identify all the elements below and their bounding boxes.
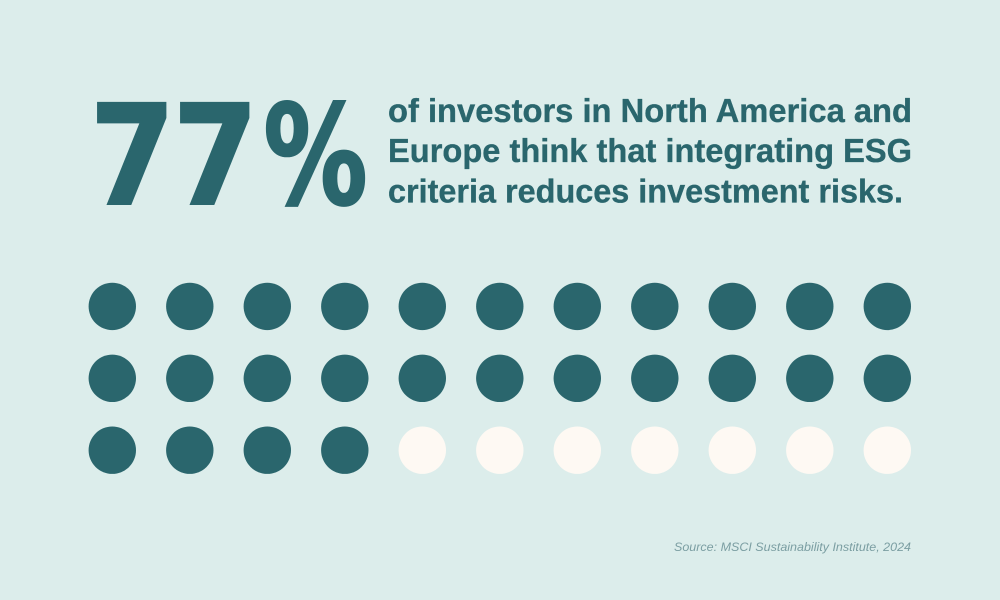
dot matrix: 77 percent filled <box>89 283 911 474</box>
dot row 3: unfilled <box>399 426 911 474</box>
source note: Source: MSCI Sustainability Institute, 2024 <box>674 540 911 554</box>
big statistic: 77%: 7 <box>173 76 258 237</box>
statement text: criteria reduces investment risks. <box>388 173 903 210</box>
dot row 2 <box>89 355 911 402</box>
statement text: Europe think that integrating ESG <box>388 132 912 169</box>
statement text: of investors in North America and <box>388 92 912 129</box>
big statistic: 77%: 7 <box>90 76 175 237</box>
dot row 1 <box>89 283 911 330</box>
big statistic: 77% <box>90 76 368 237</box>
statement text <box>388 92 912 210</box>
dot row 3: filled <box>89 426 368 474</box>
big statistic: 77%: % <box>264 76 368 237</box>
